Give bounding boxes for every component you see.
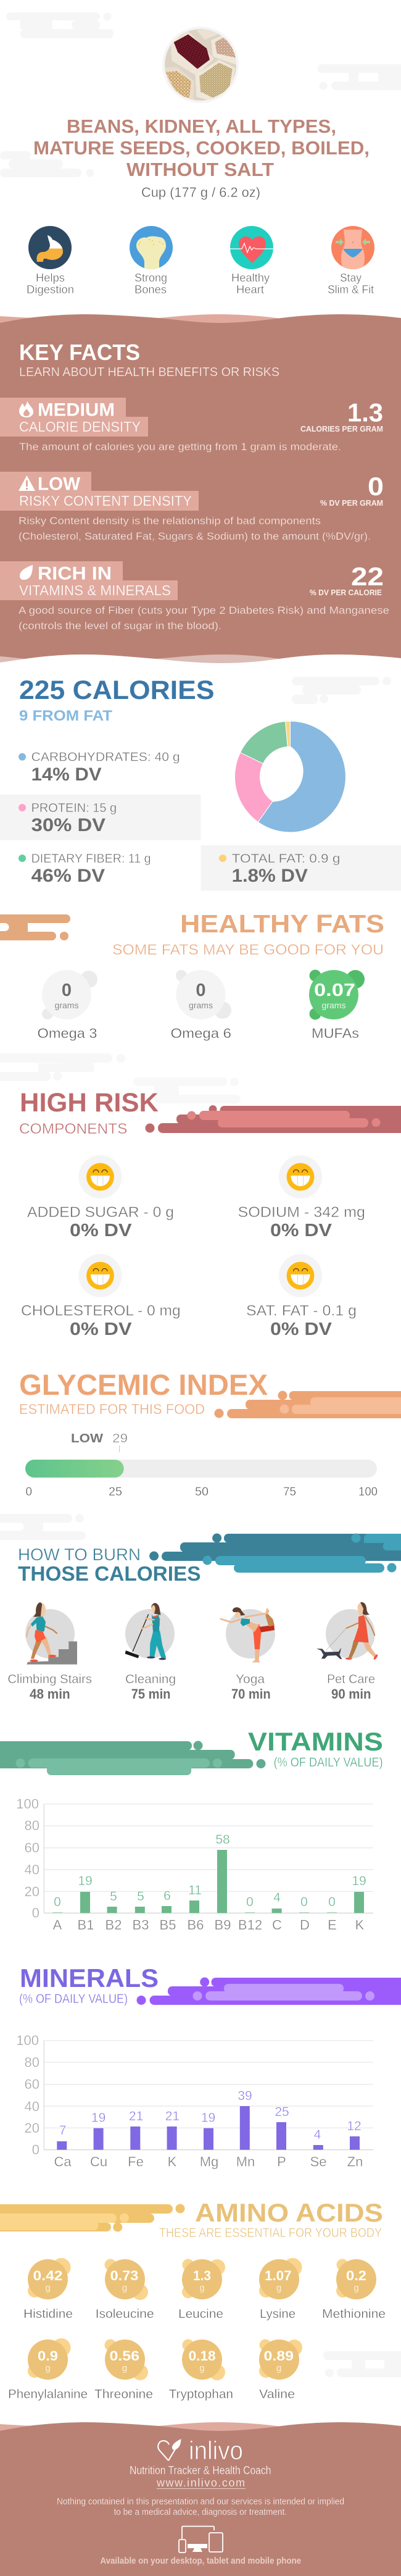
legend: total fat xyxy=(219,852,340,886)
gauge track xyxy=(25,1460,377,1478)
fat: omega 6: Omega 6 xyxy=(170,1026,231,1041)
fat: MUFAs xyxy=(309,969,365,1041)
background cloud: lower right xyxy=(323,2351,401,2377)
benefit: stay slim and fit: Stay xyxy=(340,272,362,284)
category labels: Fe xyxy=(128,2154,144,2170)
gauge fill xyxy=(25,1460,124,1478)
bar values xyxy=(59,2089,362,2142)
macro row background: protein xyxy=(0,795,201,840)
heading: healthy fats: HEALTHY FATS xyxy=(180,910,384,938)
amino acid: phenylalanine: 0.9 xyxy=(38,2348,58,2364)
fat: MUFAs: 0.07 xyxy=(314,981,355,1000)
amino acid: tryptophan: 0.18 xyxy=(189,2348,216,2364)
value: 0 xyxy=(368,472,384,501)
risk: cholesterol: CHOLESTEROL - 0 mg xyxy=(21,1303,181,1319)
legend: dietary fiber: DIETARY FIBER: 11 g xyxy=(31,852,151,866)
category labels: B9 xyxy=(215,1917,231,1933)
description: The amount of calories you are getting from 1 gram is moderate. xyxy=(19,441,341,453)
background cloud: left of high risk xyxy=(0,1053,125,1081)
icon: grinning emoji xyxy=(287,1163,314,1190)
amino acid: leucine: g xyxy=(199,2283,205,2293)
logo: inlivo heart and leaf: inlivo xyxy=(189,2436,243,2465)
label: MEDIUM xyxy=(38,400,115,420)
label: LOW xyxy=(38,474,81,494)
activity: cleaning: Cleaning xyxy=(125,1673,176,1686)
disclaimer: to be a medical advice, diagnosis or treatment. xyxy=(114,2507,287,2517)
category labels: Zn xyxy=(347,2154,363,2170)
heading: high risk: HIGH RISK xyxy=(20,1088,159,1118)
legend: total fat: 1.8% DV xyxy=(232,866,308,886)
heading: 225 calories: 225 CALORIES xyxy=(19,675,215,705)
risk: saturated fat: SAT. FAT - 0.1 g xyxy=(246,1303,357,1319)
amino acid: tryptophan: g xyxy=(199,2363,205,2373)
amino acid: tryptophan xyxy=(169,2339,233,2401)
gauge scale: 75 xyxy=(283,1485,296,1499)
y axis labels: 60 xyxy=(25,2076,39,2092)
background cloud: top right xyxy=(318,64,401,90)
y axis labels: 40 xyxy=(25,1862,39,1878)
bar values: 0 xyxy=(54,1895,61,1909)
serving size: Cup (177 g / 6.2 oz) xyxy=(141,185,260,200)
sublabel: VITAMINS & MINERALS xyxy=(19,582,171,598)
background cloud: calories xyxy=(292,677,391,704)
subheading: LEARN ABOUT HEALTH BENEFITS OR RISKS xyxy=(19,366,279,379)
category labels: Mn xyxy=(236,2154,255,2170)
gauge tick xyxy=(119,1445,120,1452)
heading: amino acids: AMINO ACIDS xyxy=(195,2198,383,2227)
background cloud: right of high risk xyxy=(133,1077,241,1103)
heading: key facts: KEY FACTS xyxy=(19,340,140,365)
category labels: K xyxy=(355,1917,365,1933)
amino acid: histidine: 0.42 xyxy=(33,2268,63,2283)
illustration: woman in dancer pose xyxy=(220,1607,275,1662)
bar values: 0 xyxy=(328,1895,336,1909)
tag background xyxy=(0,398,148,437)
decorative band: burn calories xyxy=(149,1534,401,1573)
benefit: healthy heart: Healthy xyxy=(231,272,270,284)
amino acid: lysine: Lysine xyxy=(260,2307,296,2321)
title: BEANS, KIDNEY, ALL TYPES, xyxy=(67,115,336,137)
activity: climbing stairs xyxy=(7,1602,92,1702)
risk: cholesterol xyxy=(21,1254,181,1339)
disclaimer xyxy=(57,2497,344,2517)
gridlines and axes xyxy=(44,1804,373,1913)
heading: glycemic index: GLYCEMIC INDEX xyxy=(19,1368,268,1401)
activity: cleaning: 75 min xyxy=(131,1686,170,1702)
fat: omega 6 xyxy=(170,970,231,1041)
y axis labels: 0 xyxy=(32,1905,39,1921)
legend: total fat: TOTAL FAT: 0.9 g xyxy=(232,852,340,866)
background cloud: behind title xyxy=(0,151,94,177)
activity: cleaning xyxy=(125,1603,176,1702)
website link: www.inlivo.com xyxy=(156,2477,245,2489)
subheading: components: COMPONENTS xyxy=(19,1121,127,1137)
illustration: woman walking a dog xyxy=(316,1602,378,1660)
bar values xyxy=(54,1833,366,1909)
category labels: C xyxy=(272,1917,282,1933)
bars xyxy=(57,2106,360,2150)
subheading: 9 from fat: 9 FROM FAT xyxy=(19,708,112,724)
tagline: Nutrition Tracker & Health Coach xyxy=(130,2464,271,2477)
category labels: E xyxy=(328,1917,337,1933)
gauge scale: 50 xyxy=(195,1485,209,1499)
legend: carbohydrates xyxy=(19,751,180,785)
bar values: 19 xyxy=(201,2111,215,2125)
fat: omega 3: grams xyxy=(55,1000,78,1010)
description: A good source of Fiber (cuts your Type 2 Diabetes Risk) and Manganese xyxy=(19,605,389,616)
amino acid: phenylalanine xyxy=(8,2338,88,2401)
benefit: strong bones: Bones xyxy=(134,283,167,296)
bar values: 11 xyxy=(188,1883,202,1897)
category labels: B3 xyxy=(133,1917,149,1933)
activity: pet care xyxy=(316,1602,378,1702)
gauge: glycemic index xyxy=(25,1432,378,1499)
bar values: 6 xyxy=(163,1889,171,1903)
amino acid: threonine: Threonine xyxy=(94,2388,153,2401)
footer background xyxy=(0,2422,401,2576)
benefit: helps digestion: Helps xyxy=(36,272,65,284)
title xyxy=(33,115,370,180)
category labels: Ca xyxy=(54,2154,72,2170)
amino acid: lysine: g xyxy=(276,2283,281,2293)
bar values: 25 xyxy=(275,2105,289,2119)
decorative band: amino acids xyxy=(0,2204,185,2231)
amino acid: methionine xyxy=(322,2259,386,2321)
icon: warning triangle xyxy=(19,475,35,491)
icon: grinning emoji xyxy=(86,1163,114,1190)
amino acid: leucine: Leucine xyxy=(178,2307,223,2321)
bar values: 5 xyxy=(137,1889,144,1904)
fat: MUFAs: grams xyxy=(322,1000,345,1010)
y axis labels xyxy=(16,1796,39,1921)
bar values: 21 xyxy=(129,2109,143,2123)
y axis labels: 80 xyxy=(25,2055,39,2070)
panel: footer xyxy=(0,2422,401,2576)
wave: light rose highlights at bottom xyxy=(0,654,279,663)
icon: desktop, tablet and mobile devices xyxy=(179,2527,223,2553)
amino acid: valine: Valine xyxy=(259,2388,295,2401)
unit: CALORIES PER GRAM xyxy=(300,425,383,433)
heading: how to burn: HOW TO BURN xyxy=(18,1545,141,1564)
y axis labels: 20 xyxy=(25,1884,39,1899)
y axis labels: 80 xyxy=(25,1818,39,1833)
illustration: woman climbing stairs xyxy=(27,1602,77,1665)
amino acid: lysine xyxy=(259,2258,302,2321)
bar values: 19 xyxy=(78,1874,93,1888)
risk: added sugar xyxy=(27,1155,174,1240)
amino acid: lysine: 1.07 xyxy=(265,2268,292,2283)
amino acid: histidine xyxy=(23,2258,73,2321)
legend: protein: 30% DV xyxy=(31,815,105,835)
value: 22 xyxy=(351,562,384,591)
benefit: healthy heart: Heart xyxy=(236,283,264,296)
bar values: 19 xyxy=(91,2111,105,2125)
bar values: 39 xyxy=(238,2089,252,2103)
amino acid: tryptophan: Tryptophan xyxy=(169,2388,233,2401)
icon: grinning emoji xyxy=(86,1262,114,1289)
decorative band: minerals xyxy=(137,1977,401,2005)
subheading: percent of daily value: (% OF DAILY VALUE) xyxy=(19,1992,128,2006)
legend: dietary fiber xyxy=(19,852,151,886)
category labels: P xyxy=(277,2154,286,2170)
logo: inlivo heart and leaf xyxy=(158,2436,243,2465)
amino acid: isoleucine: 0.73 xyxy=(110,2268,138,2283)
subheading: percent of daily value: (% OF DAILY VALUE) xyxy=(274,1755,383,1770)
gridlines and axes xyxy=(44,2041,373,2150)
amino acid: leucine xyxy=(178,2259,225,2321)
description: (Cholesterol, Saturated Fat, Sugars & Sodium) to the amount (%DV/gr). xyxy=(19,531,371,542)
category labels: B12 xyxy=(238,1917,262,1933)
category labels xyxy=(53,1917,365,1933)
fact: risky content density xyxy=(0,472,384,542)
activity: pet care: Pet Care xyxy=(327,1673,375,1686)
icon: grinning emoji xyxy=(287,1262,314,1289)
donut chart: macronutrients xyxy=(234,721,345,832)
illustration: woman sweeping xyxy=(125,1603,166,1660)
category labels: Mg xyxy=(200,2154,218,2170)
legend: carbohydrates: CARBOHYDRATES: 40 g xyxy=(31,751,180,764)
gauge label: LOW xyxy=(71,1432,103,1445)
description xyxy=(19,516,371,542)
amino acid: histidine: Histidine xyxy=(23,2307,73,2321)
food photo: assorted beans in sacks xyxy=(162,27,239,103)
amino acid: methionine: Methionine xyxy=(322,2307,386,2321)
bar values: 4 xyxy=(273,1891,281,1905)
unit: % DV PER CALORIE xyxy=(310,588,382,597)
fat: omega 3 xyxy=(37,970,97,1041)
tag background xyxy=(0,561,178,600)
amino acid: valine: g xyxy=(276,2363,281,2373)
y axis labels: 100 xyxy=(16,2033,39,2048)
amino acid: methionine: g xyxy=(353,2283,359,2293)
benefit: strong bones: Strong xyxy=(134,272,167,284)
heading: vitamins: VITAMINS xyxy=(248,1727,383,1756)
fact: calorie density xyxy=(0,398,383,453)
category labels: A xyxy=(53,1917,62,1933)
heading: minerals: MINERALS xyxy=(20,1963,159,1993)
amino acid: isoleucine: Isoleucine xyxy=(96,2307,154,2321)
fat: omega 6: 0 xyxy=(196,981,206,1000)
description: Risky Content density is the relationship of bad components xyxy=(19,516,321,527)
benefit: strong bones xyxy=(130,226,173,296)
amino acid: histidine: g xyxy=(45,2283,51,2293)
activity: climbing stairs: 48 min xyxy=(30,1686,70,1702)
risk: cholesterol: 0% DV xyxy=(70,1319,132,1339)
bar chart: minerals xyxy=(16,2033,373,2170)
background cloud: burn calories xyxy=(0,1514,86,1540)
category labels: B2 xyxy=(105,1917,122,1933)
y axis labels: 0 xyxy=(32,2142,39,2157)
availability note: Available on your desktop, tablet and mobile phone xyxy=(100,2556,301,2566)
value: 1.3 xyxy=(347,398,383,427)
tag background xyxy=(0,472,199,511)
macro row background: total fat xyxy=(201,845,401,891)
legend: protein: PROTEIN: 15 g xyxy=(31,801,117,815)
activity: yoga: 70 min xyxy=(231,1686,271,1702)
disclaimer: Nothing contained in this presentation and our services is intended or implied xyxy=(57,2497,344,2507)
category labels: K xyxy=(168,2154,177,2170)
decorative band: glycemic index xyxy=(215,1390,401,1418)
decorative band: high risk xyxy=(146,1105,401,1133)
bar values: 5 xyxy=(110,1889,117,1904)
legend: dietary fiber: 46% DV xyxy=(31,866,105,886)
risk: sodium: SODIUM - 342 mg xyxy=(238,1204,365,1221)
wave: light rose highlights xyxy=(0,2422,281,2436)
category labels: B6 xyxy=(188,1917,204,1933)
risk: sodium: 0% DV xyxy=(270,1221,333,1240)
legend: protein xyxy=(19,801,117,835)
subheading: ESTIMATED FOR THIS FOOD xyxy=(19,1401,205,1417)
panel background xyxy=(0,314,401,659)
y axis labels: 100 xyxy=(16,1796,39,1812)
category labels: B5 xyxy=(160,1917,176,1933)
decorative band: vitamins xyxy=(0,1741,265,1775)
icon: flame xyxy=(19,401,33,417)
fat: MUFAs: MUFAs xyxy=(312,1026,359,1041)
wave: light rose highlights at top xyxy=(0,314,281,328)
bars xyxy=(52,1850,364,1913)
benefit: stay slim and fit: Slim & Fit xyxy=(328,283,374,296)
y axis labels: 20 xyxy=(25,2120,39,2136)
fact: rich in vitamins and minerals xyxy=(0,561,389,632)
decorative band: healthy fats xyxy=(0,914,70,940)
amino acid: phenylalanine: Phenylalanine xyxy=(8,2388,88,2401)
heading: those calories: THOSE CALORIES xyxy=(18,1562,201,1585)
title: WITHOUT SALT xyxy=(126,159,274,180)
sublabel: CALORIE DENSITY xyxy=(19,419,141,435)
amino acid: threonine: g xyxy=(122,2363,127,2373)
category labels: Cu xyxy=(90,2154,107,2170)
y axis labels xyxy=(16,2033,39,2157)
activity: yoga: Yoga xyxy=(236,1673,265,1686)
risk: saturated fat: 0% DV xyxy=(270,1319,333,1339)
risk: added sugar: ADDED SUGAR - 0 g xyxy=(27,1204,174,1221)
label: RICH IN xyxy=(38,563,112,584)
y axis labels: 40 xyxy=(25,2099,39,2114)
bar values: 0 xyxy=(246,1895,254,1909)
category labels: Se xyxy=(310,2154,326,2170)
background cloud: top left xyxy=(6,12,114,38)
title: MATURE SEEDS, COOKED, BOILED, xyxy=(33,137,370,159)
amino acid: phenylalanine: g xyxy=(45,2363,51,2373)
category labels: D xyxy=(300,1917,310,1933)
sublabel: RISKY CONTENT DENSITY xyxy=(19,493,192,509)
panel: key facts xyxy=(0,314,401,663)
fat: omega 3: 0 xyxy=(62,981,72,1000)
fat: omega 3: Omega 3 xyxy=(37,1026,97,1041)
gauge value: 29 xyxy=(112,1432,128,1445)
bar values: 4 xyxy=(314,2128,321,2142)
amino acid: methionine: 0.2 xyxy=(346,2268,366,2283)
bar values: 12 xyxy=(347,2119,362,2133)
icon: leaf xyxy=(20,565,33,580)
description xyxy=(19,605,389,632)
benefit: healthy heart xyxy=(230,226,273,296)
amino acid: leucine: 1.3 xyxy=(193,2268,211,2283)
amino acid: isoleucine xyxy=(96,2259,154,2321)
legend: carbohydrates: 14% DV xyxy=(31,764,102,785)
bar values: 0 xyxy=(300,1895,308,1909)
subheading: SOME FATS MAY BE GOOD FOR YOU xyxy=(112,942,384,958)
unit: % DV PER GRAM xyxy=(320,499,383,508)
description: (controls the level of sugar in the blood). xyxy=(19,621,221,632)
risk: saturated fat xyxy=(246,1254,357,1339)
amino acid: valine xyxy=(259,2339,302,2401)
bar values: 21 xyxy=(165,2109,180,2123)
fat: omega 6: grams xyxy=(189,1000,213,1010)
amino acid: isoleucine: g xyxy=(122,2283,127,2293)
category labels: B1 xyxy=(78,1917,94,1933)
risk: added sugar: 0% DV xyxy=(70,1221,132,1240)
benefit: helps digestion xyxy=(27,226,74,296)
gauge scale: 100 xyxy=(358,1485,378,1499)
gauge scale: 25 xyxy=(109,1485,122,1499)
risk: sodium xyxy=(238,1155,365,1240)
gauge scale xyxy=(26,1485,378,1499)
benefit: stay slim and fit xyxy=(328,226,374,296)
benefit: helps digestion: Digestion xyxy=(27,283,74,296)
bar values: 58 xyxy=(215,1833,230,1847)
amino acid: threonine xyxy=(94,2339,153,2401)
amino acid: valine: 0.89 xyxy=(264,2348,294,2364)
bar values: 7 xyxy=(59,2123,66,2138)
activity: yoga xyxy=(220,1607,275,1702)
category labels xyxy=(54,2154,363,2170)
activity: climbing stairs: Climbing Stairs xyxy=(7,1673,92,1686)
y axis labels: 60 xyxy=(25,1840,39,1855)
bar values: 19 xyxy=(352,1874,366,1888)
activity: pet care: 90 min xyxy=(331,1686,371,1702)
gauge scale: 0 xyxy=(26,1485,32,1499)
bar chart: vitamins xyxy=(16,1796,373,1933)
amino acid: threonine: 0.56 xyxy=(110,2348,139,2364)
